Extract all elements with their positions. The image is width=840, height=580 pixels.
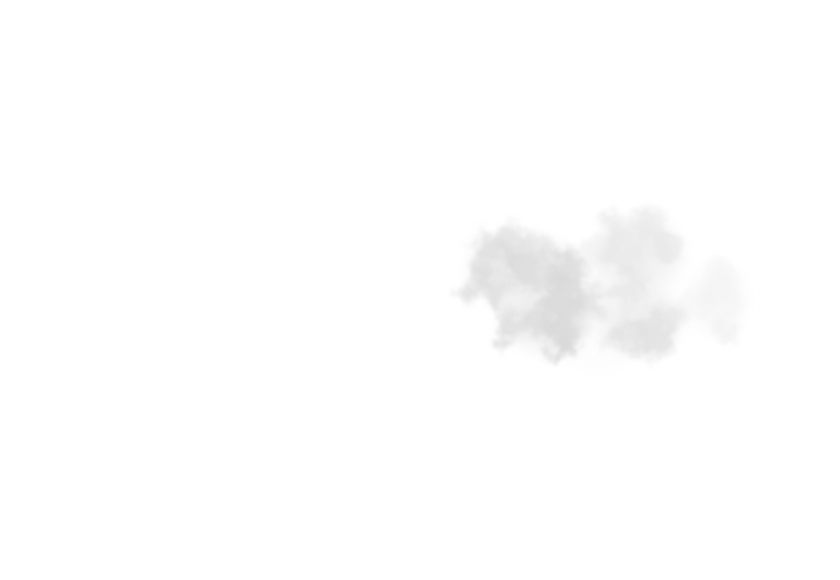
soft base haze [472, 219, 744, 367]
billowing smoke body [458, 206, 742, 360]
left smoke puffs [458, 223, 606, 360]
far right wisps [684, 259, 742, 344]
right smoke puffs [582, 206, 687, 360]
